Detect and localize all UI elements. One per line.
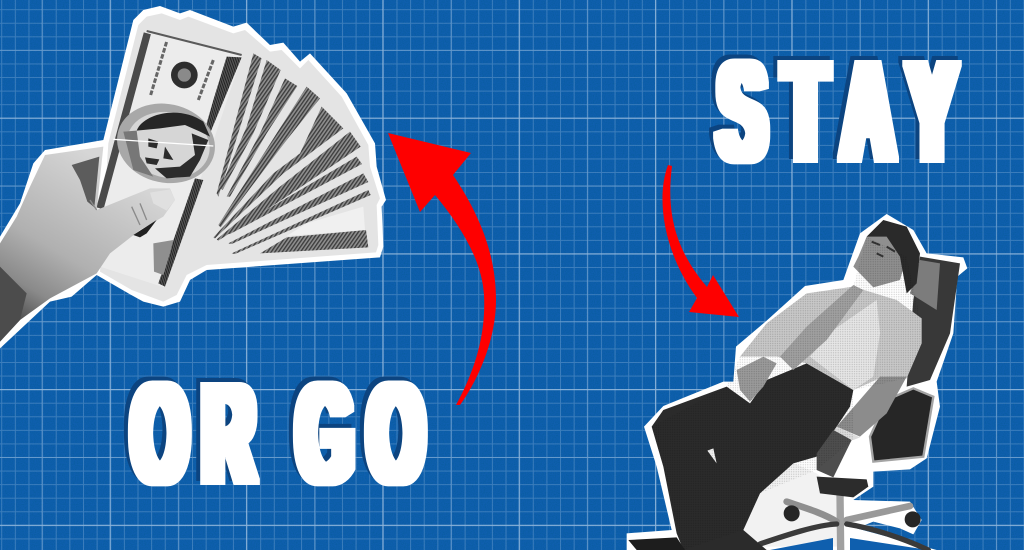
chair [907,257,960,387]
fanned bill strips [213,53,371,254]
tie [780,285,863,370]
halftone overlay [652,237,922,550]
portrait [110,95,222,192]
arrow: small red curved arrow down to man [662,165,739,317]
forearm and hands [837,377,907,437]
heading: STAY: STAY [718,32,956,190]
hand [0,147,175,342]
chair base [770,538,833,550]
front bill [95,31,242,287]
head [853,233,907,287]
white sticker outline [0,6,386,348]
heading: OR GO: OR GO [132,354,423,512]
bills paper [100,13,380,302]
legs [652,363,853,550]
shirt [740,287,922,390]
white sticker outline [627,214,967,550]
icon: man asleep in office chair [627,214,967,550]
arrow: big red curved arrow up to money [388,133,496,405]
white gap under seat [740,460,840,547]
icon: hand holding fan of dollar bills [0,6,386,348]
